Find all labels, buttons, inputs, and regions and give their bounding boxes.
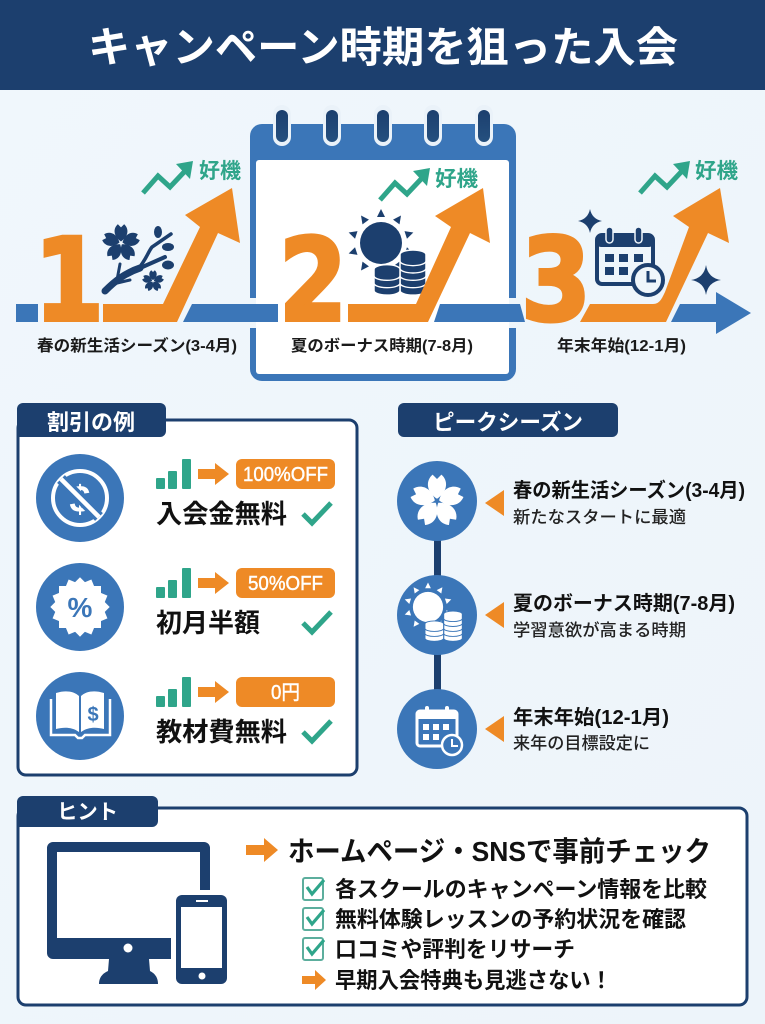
row: summer <box>485 592 735 640</box>
icon: cherry branch <box>101 224 174 292</box>
icon: sun and coins <box>347 209 426 295</box>
checklist item 2: 無料体験レッスンの予約状況を確認 <box>335 907 686 932</box>
row: year end <box>485 706 669 753</box>
checklist item 1: 各スクールのキャンペーン情報を比較 <box>335 877 707 902</box>
icon: book with dollar <box>36 672 124 760</box>
growth arrow 2 <box>348 188 490 322</box>
calendar frame around summer step <box>248 105 518 381</box>
panel: peak seasons <box>397 403 745 769</box>
row: summer: 夏のボーナス時期(7-8月) <box>513 592 735 615</box>
icon: percent badge: % <box>68 592 93 623</box>
row: first month half <box>156 568 335 638</box>
hint heading: ホームページ・SNSで事前チェック <box>288 836 711 867</box>
panel: hint <box>17 796 747 1005</box>
step 3: year end <box>521 160 738 355</box>
icon: percent badge <box>36 563 124 651</box>
heading tab: discount <box>17 403 166 437</box>
panel: discount examples <box>17 403 357 775</box>
row: entry fee free: 入会金無料 <box>156 499 287 529</box>
number 1: 1 <box>34 214 104 347</box>
row: materials free: 教材費無料 <box>156 717 287 747</box>
row: summer: 学習意欲が高まる時期 <box>513 620 686 640</box>
step 2: summer <box>279 168 490 355</box>
row: spring <box>485 478 745 527</box>
label spring: 春の新生活シーズン(3-4月) <box>37 336 237 355</box>
heading tab: peak <box>398 403 618 437</box>
row: year end: 年末年始(12-1月) <box>513 706 669 729</box>
icon: sparkle bottom <box>691 265 721 295</box>
heading tab: peak: ピークシーズン <box>433 410 583 435</box>
icon: sparkle top <box>578 209 602 233</box>
number 3: 3 <box>521 214 591 347</box>
step 1: spring <box>34 160 241 355</box>
row: materials free: 0円 <box>271 682 300 704</box>
timeline arrow <box>16 292 751 334</box>
connector line <box>434 535 441 695</box>
icon: no fee: $ <box>69 479 91 521</box>
step 1: spring: 好機 <box>199 160 241 183</box>
label year end: 年末年始(12-1月) <box>557 336 686 355</box>
heading tab: hint <box>17 796 158 827</box>
growth arrow 3 <box>580 188 729 322</box>
row: spring: 新たなスタートに最適 <box>513 508 686 527</box>
heading tab: discount: 割引の例 <box>47 410 135 435</box>
icon: sun coins circle <box>397 575 477 655</box>
icon: calendar with clock <box>597 227 663 295</box>
icon: calendar circle <box>397 689 477 769</box>
row: year end: 来年の目標設定に <box>513 734 650 753</box>
icon: sakura circle <box>397 461 477 541</box>
label summer: 夏のボーナス時期(7-8月) <box>291 337 473 355</box>
title banner: キャンペーン時期を狙った入会 <box>88 24 678 71</box>
row: first month half: 初月半額 <box>156 608 260 638</box>
row: materials free <box>156 677 335 747</box>
row: entry fee free: 100%OFF <box>243 464 328 486</box>
row: spring: 春の新生活シーズン(3-4月) <box>513 478 745 502</box>
icon: monitor <box>47 842 210 984</box>
heading tab: hint: ヒント <box>57 801 118 824</box>
checklist item 3: 口コミや評判をリサーチ <box>335 937 575 962</box>
icon: book with dollar: $ <box>87 704 99 726</box>
row: first month half: 50%OFF <box>248 573 323 595</box>
heading arrow <box>246 838 278 862</box>
icon: no fee <box>36 454 124 542</box>
row: entry fee free <box>156 459 335 529</box>
trend arrow 好機 3 <box>640 161 690 193</box>
title banner <box>0 0 765 90</box>
trend arrow 好機 1 <box>143 161 193 193</box>
step 2: summer: 好機 <box>435 168 478 191</box>
step 3: year end: 好機 <box>695 160 738 183</box>
bonus item with arrow: 早期入会特典も見逃さない！ <box>335 968 612 993</box>
number 2: 2 <box>279 214 347 347</box>
growth arrow 1 <box>103 188 240 322</box>
icon: phone <box>176 895 227 984</box>
trend arrow 好機 2 <box>380 168 430 200</box>
